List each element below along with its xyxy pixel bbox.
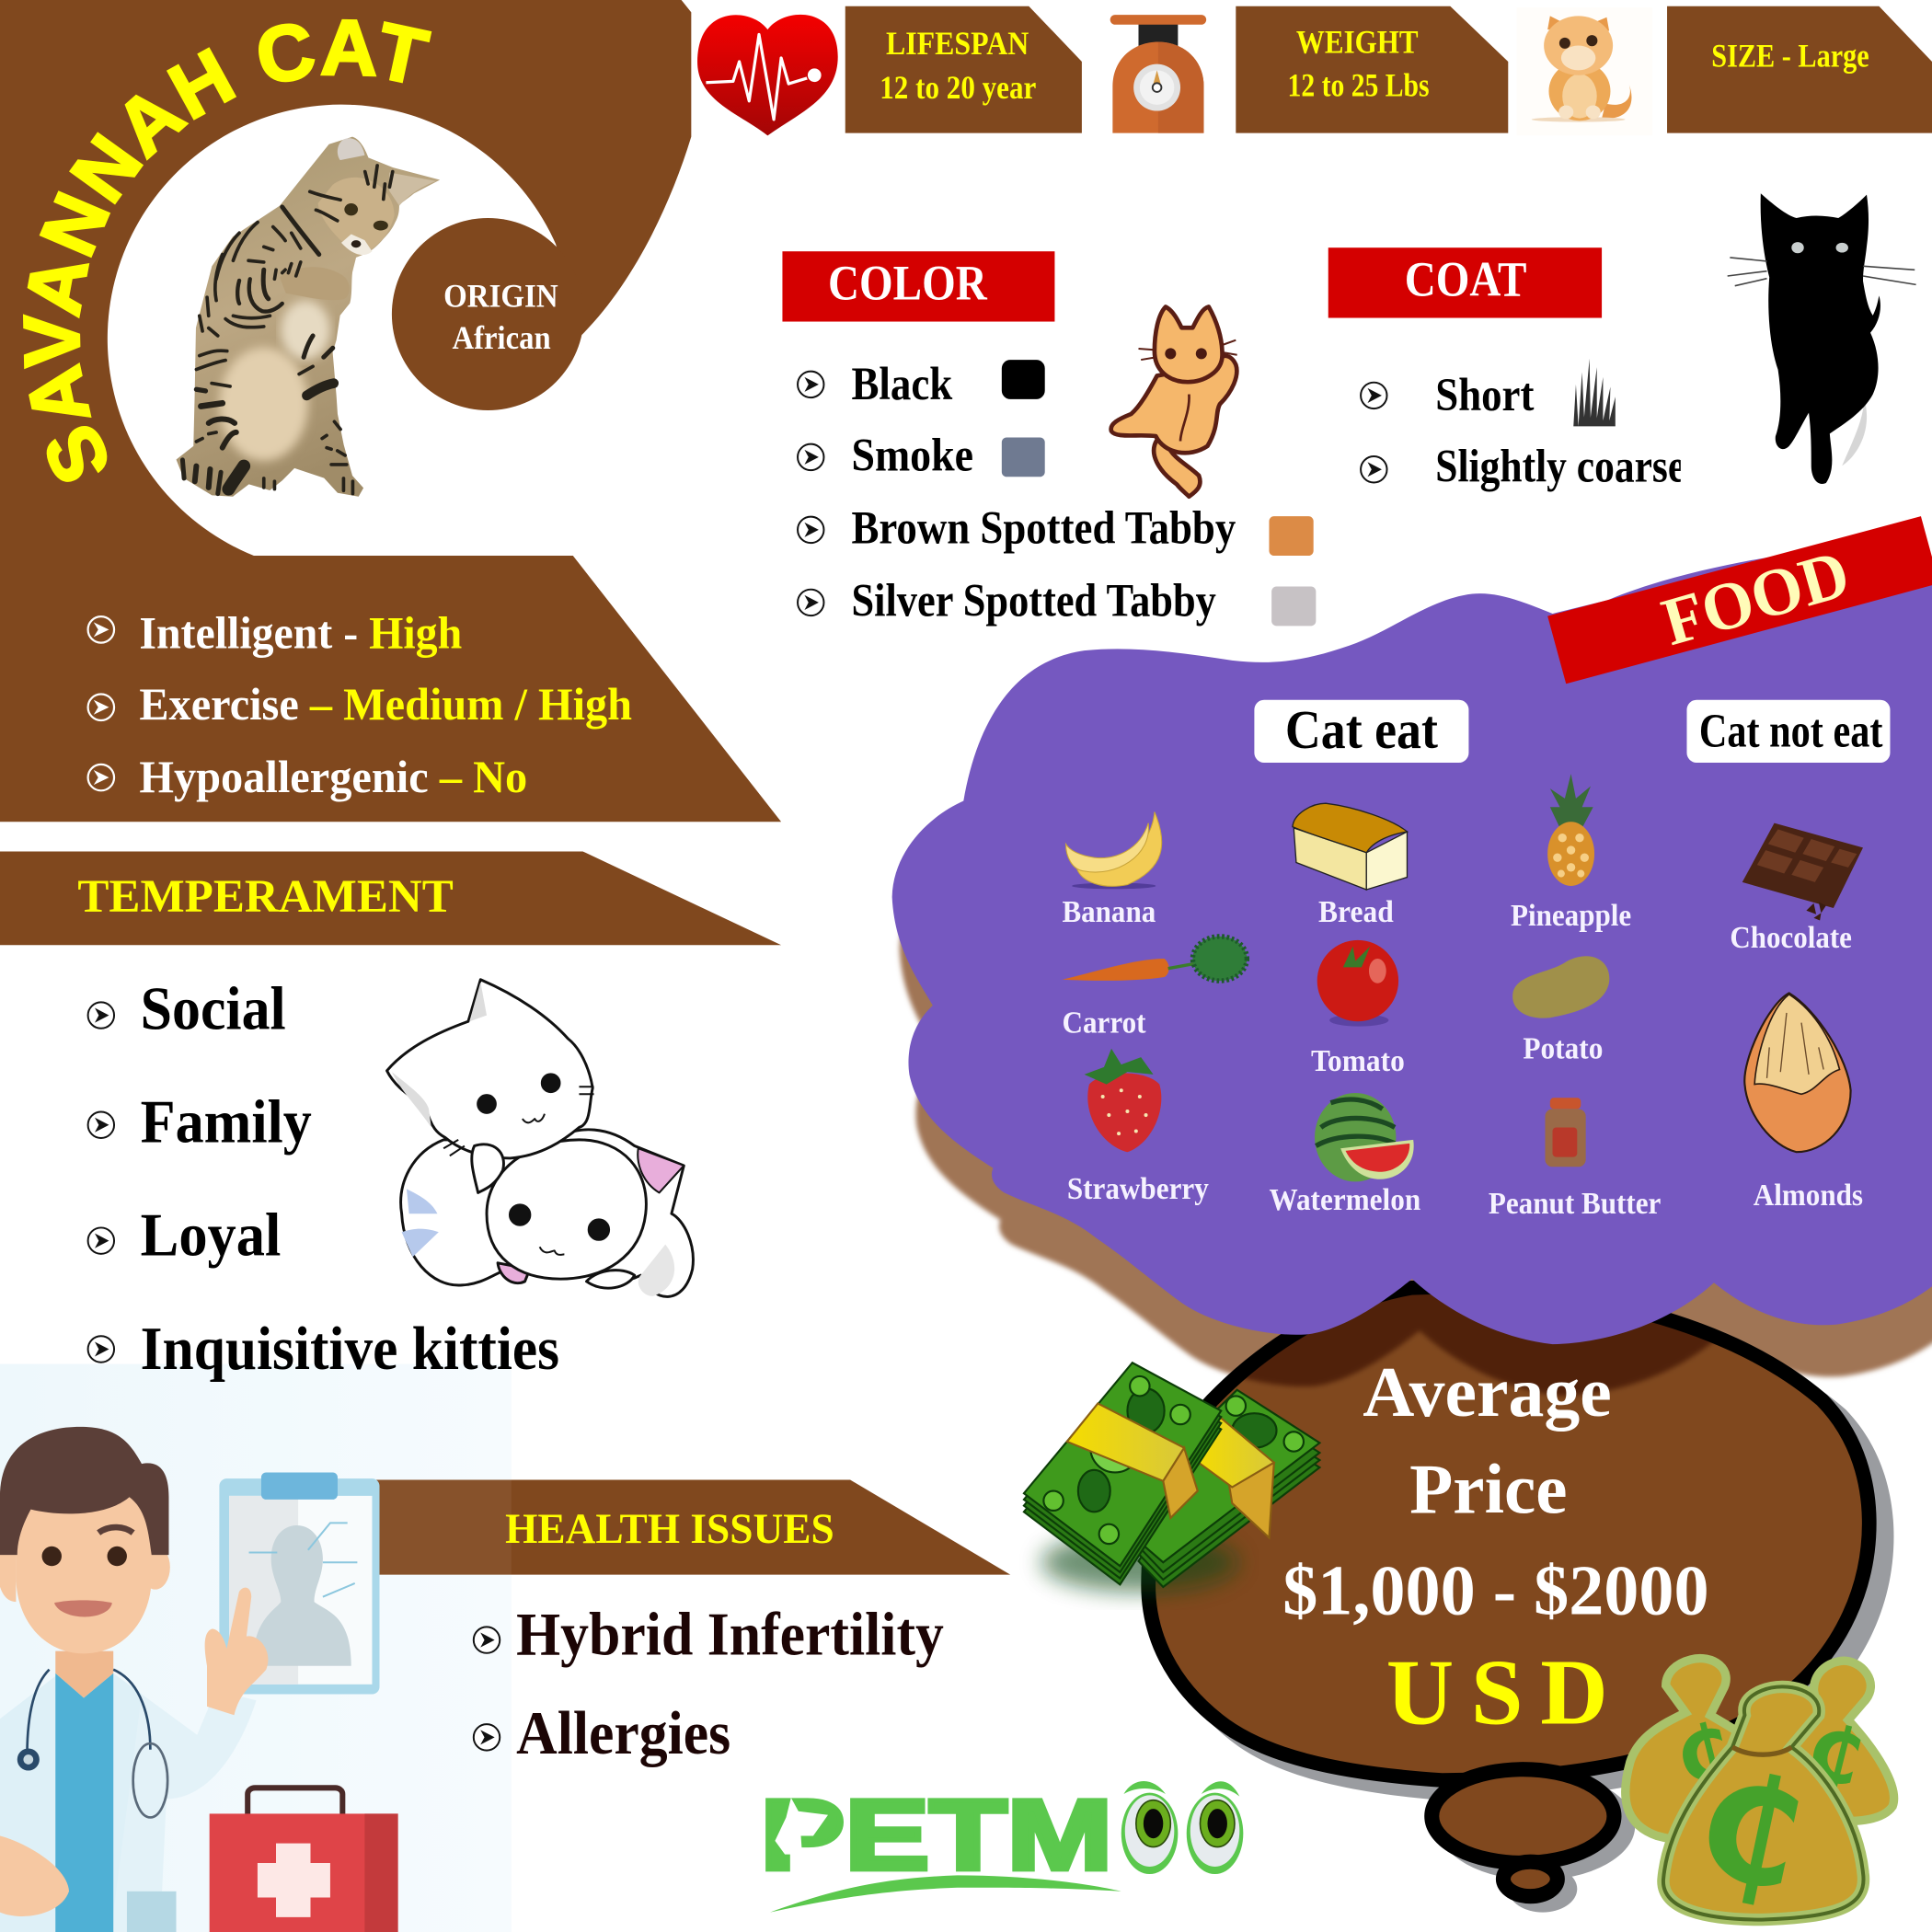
icon: orange cartoon cat (1111, 306, 1237, 497)
logo: Petmoo: PETM (760, 1779, 1112, 1891)
food: chocolate: Chocolate (1730, 921, 1852, 955)
heading: cat eat: Cat eat (1285, 699, 1438, 760)
bubble body (1148, 1287, 1869, 1780)
color heading: COLOR (828, 255, 988, 310)
color: black (798, 359, 1045, 410)
panel: coat (1328, 247, 1685, 493)
food: tomato: Tomato (1311, 1044, 1405, 1078)
color: silver spotted tabby: Silver Spotted Tabby (851, 576, 1216, 627)
panel: doctor illustration (0, 1427, 398, 1932)
food: potato (1512, 956, 1609, 1065)
food: chocolate (1730, 823, 1863, 955)
coat: short: Short (1435, 370, 1534, 421)
title: Savannah Cat: SAVANNAH CAT (22, 18, 432, 482)
temperament panel (0, 851, 781, 1383)
food ribbon: FOOD (1654, 535, 1857, 660)
food: pineapple (1511, 774, 1631, 933)
health issues list: Hybrid Infertility (516, 1601, 944, 1669)
coat heading (1328, 247, 1602, 318)
food: almonds: Almonds (1754, 1179, 1863, 1213)
food: banana: Banana (1062, 895, 1156, 929)
temperament list: Inquisitive kitties (141, 1315, 559, 1383)
panel: weight: 12 to 25 Lbs (1288, 66, 1430, 103)
food: peanut butter: Peanut Butter (1489, 1187, 1661, 1221)
logo eyes (1121, 1781, 1243, 1874)
food: almonds (1744, 993, 1863, 1213)
origin text: African (453, 319, 551, 356)
origin text (443, 277, 558, 356)
color heading (782, 251, 1054, 322)
icon: doctor (0, 1427, 268, 1932)
temperament heading: TEMPERAMENT (77, 871, 454, 923)
left bag (1626, 1659, 1775, 1840)
food: strawberry: Strawberry (1067, 1172, 1209, 1206)
back stack (1109, 1390, 1319, 1587)
bubble tail (1432, 1769, 1614, 1896)
health issues list: Allergies (516, 1699, 730, 1767)
temperament list: Family (141, 1088, 312, 1156)
panel: weight (1236, 6, 1508, 133)
temperament list (88, 974, 559, 1383)
icon: black cat (1728, 193, 1916, 484)
color: black: Black (851, 359, 953, 410)
logo: Petmoo (760, 1779, 1243, 1913)
origin text: ORIGIN (443, 277, 558, 314)
icon: clipboard (219, 1472, 379, 1695)
icon: fur tuft (1573, 359, 1616, 426)
food: bread (1293, 803, 1407, 929)
icon: money bags (1626, 1659, 1894, 1925)
panel: size: SIZE - Large (1711, 37, 1869, 74)
color: smoke (798, 431, 1045, 482)
coat: slightly coarse (1360, 449, 1681, 491)
temperament list: Social (141, 974, 286, 1042)
color: smoke: Smoke (851, 431, 973, 482)
front bag: ₵ (1683, 1739, 1817, 1925)
food: watermelon (1269, 1093, 1421, 1217)
traits list (88, 607, 632, 802)
icon: two white kittens (387, 980, 693, 1296)
temperament heading (0, 851, 781, 945)
price text (1282, 1352, 1709, 1745)
front stack (1024, 1363, 1221, 1584)
color: brown spotted tabby: Brown Spotted Tabby (851, 503, 1236, 555)
cat photo: spotted savannah kitten (177, 137, 440, 497)
price text: Price (1409, 1450, 1568, 1529)
price text: Average (1363, 1352, 1612, 1432)
bubble shadow (1158, 1294, 1893, 1913)
health issues list (474, 1601, 944, 1767)
food: peanut butter (1489, 1098, 1661, 1221)
panel: lifespan: LIFESPAN (886, 25, 1029, 62)
traits list: Intelligent - High (139, 607, 462, 658)
heading: cat not eat (1686, 700, 1890, 763)
traits list: Hypoallergenic – No (139, 752, 527, 802)
panel: size (1667, 6, 1932, 133)
header panel: brown spiral with traits (0, 0, 781, 822)
icon: heart with pulse (697, 15, 838, 135)
front bag (1663, 1686, 1864, 1925)
coat: slightly coarse: Slightly coarse (1435, 442, 1685, 493)
health issues banner: HEALTH ISSUES (505, 1505, 834, 1553)
food ribbon (1547, 516, 1932, 684)
food: tomato (1311, 940, 1405, 1078)
food: pineapple: Pineapple (1511, 899, 1631, 933)
left bag: ₵ (1667, 1706, 1741, 1805)
icon: sitting orange kitten (1517, 7, 1652, 135)
panel: color (782, 251, 1316, 627)
icon: first aid kit (210, 1788, 398, 1932)
price text: $1,000 - $2000 (1282, 1550, 1709, 1629)
panel: doctor background (0, 1364, 512, 1932)
food: watermelon: Watermelon (1269, 1183, 1421, 1217)
heading: cat not eat: Cat not eat (1699, 705, 1883, 758)
food: bread: Bread (1318, 895, 1394, 929)
panel: lifespan: 12 to 20 year (880, 69, 1036, 106)
panel: lifespan (845, 6, 1082, 133)
price text: USD (1386, 1641, 1608, 1745)
health issues banner (370, 1479, 1010, 1575)
food cloud (892, 542, 1932, 1344)
coat: short (1361, 370, 1534, 421)
temperament list: Loyal (141, 1202, 281, 1270)
right bag: ₵ (1799, 1706, 1871, 1805)
food: potato: Potato (1523, 1031, 1603, 1065)
price bubble (1148, 1287, 1893, 1913)
food: strawberry (1067, 1049, 1209, 1206)
food cloud shadow (900, 637, 1932, 1396)
food: carrot (1062, 937, 1247, 1040)
icon: money stacks (1024, 1363, 1319, 1592)
right bag (1775, 1661, 1894, 1822)
food: carrot: Carrot (1062, 1006, 1146, 1040)
panel: weight: WEIGHT (1296, 24, 1419, 61)
food: banana (1062, 812, 1162, 929)
icon: weighing scale (1110, 15, 1206, 133)
coat heading: COAT (1405, 251, 1526, 306)
origin circle (392, 218, 584, 410)
traits list: Exercise – Medium / High (139, 679, 632, 730)
